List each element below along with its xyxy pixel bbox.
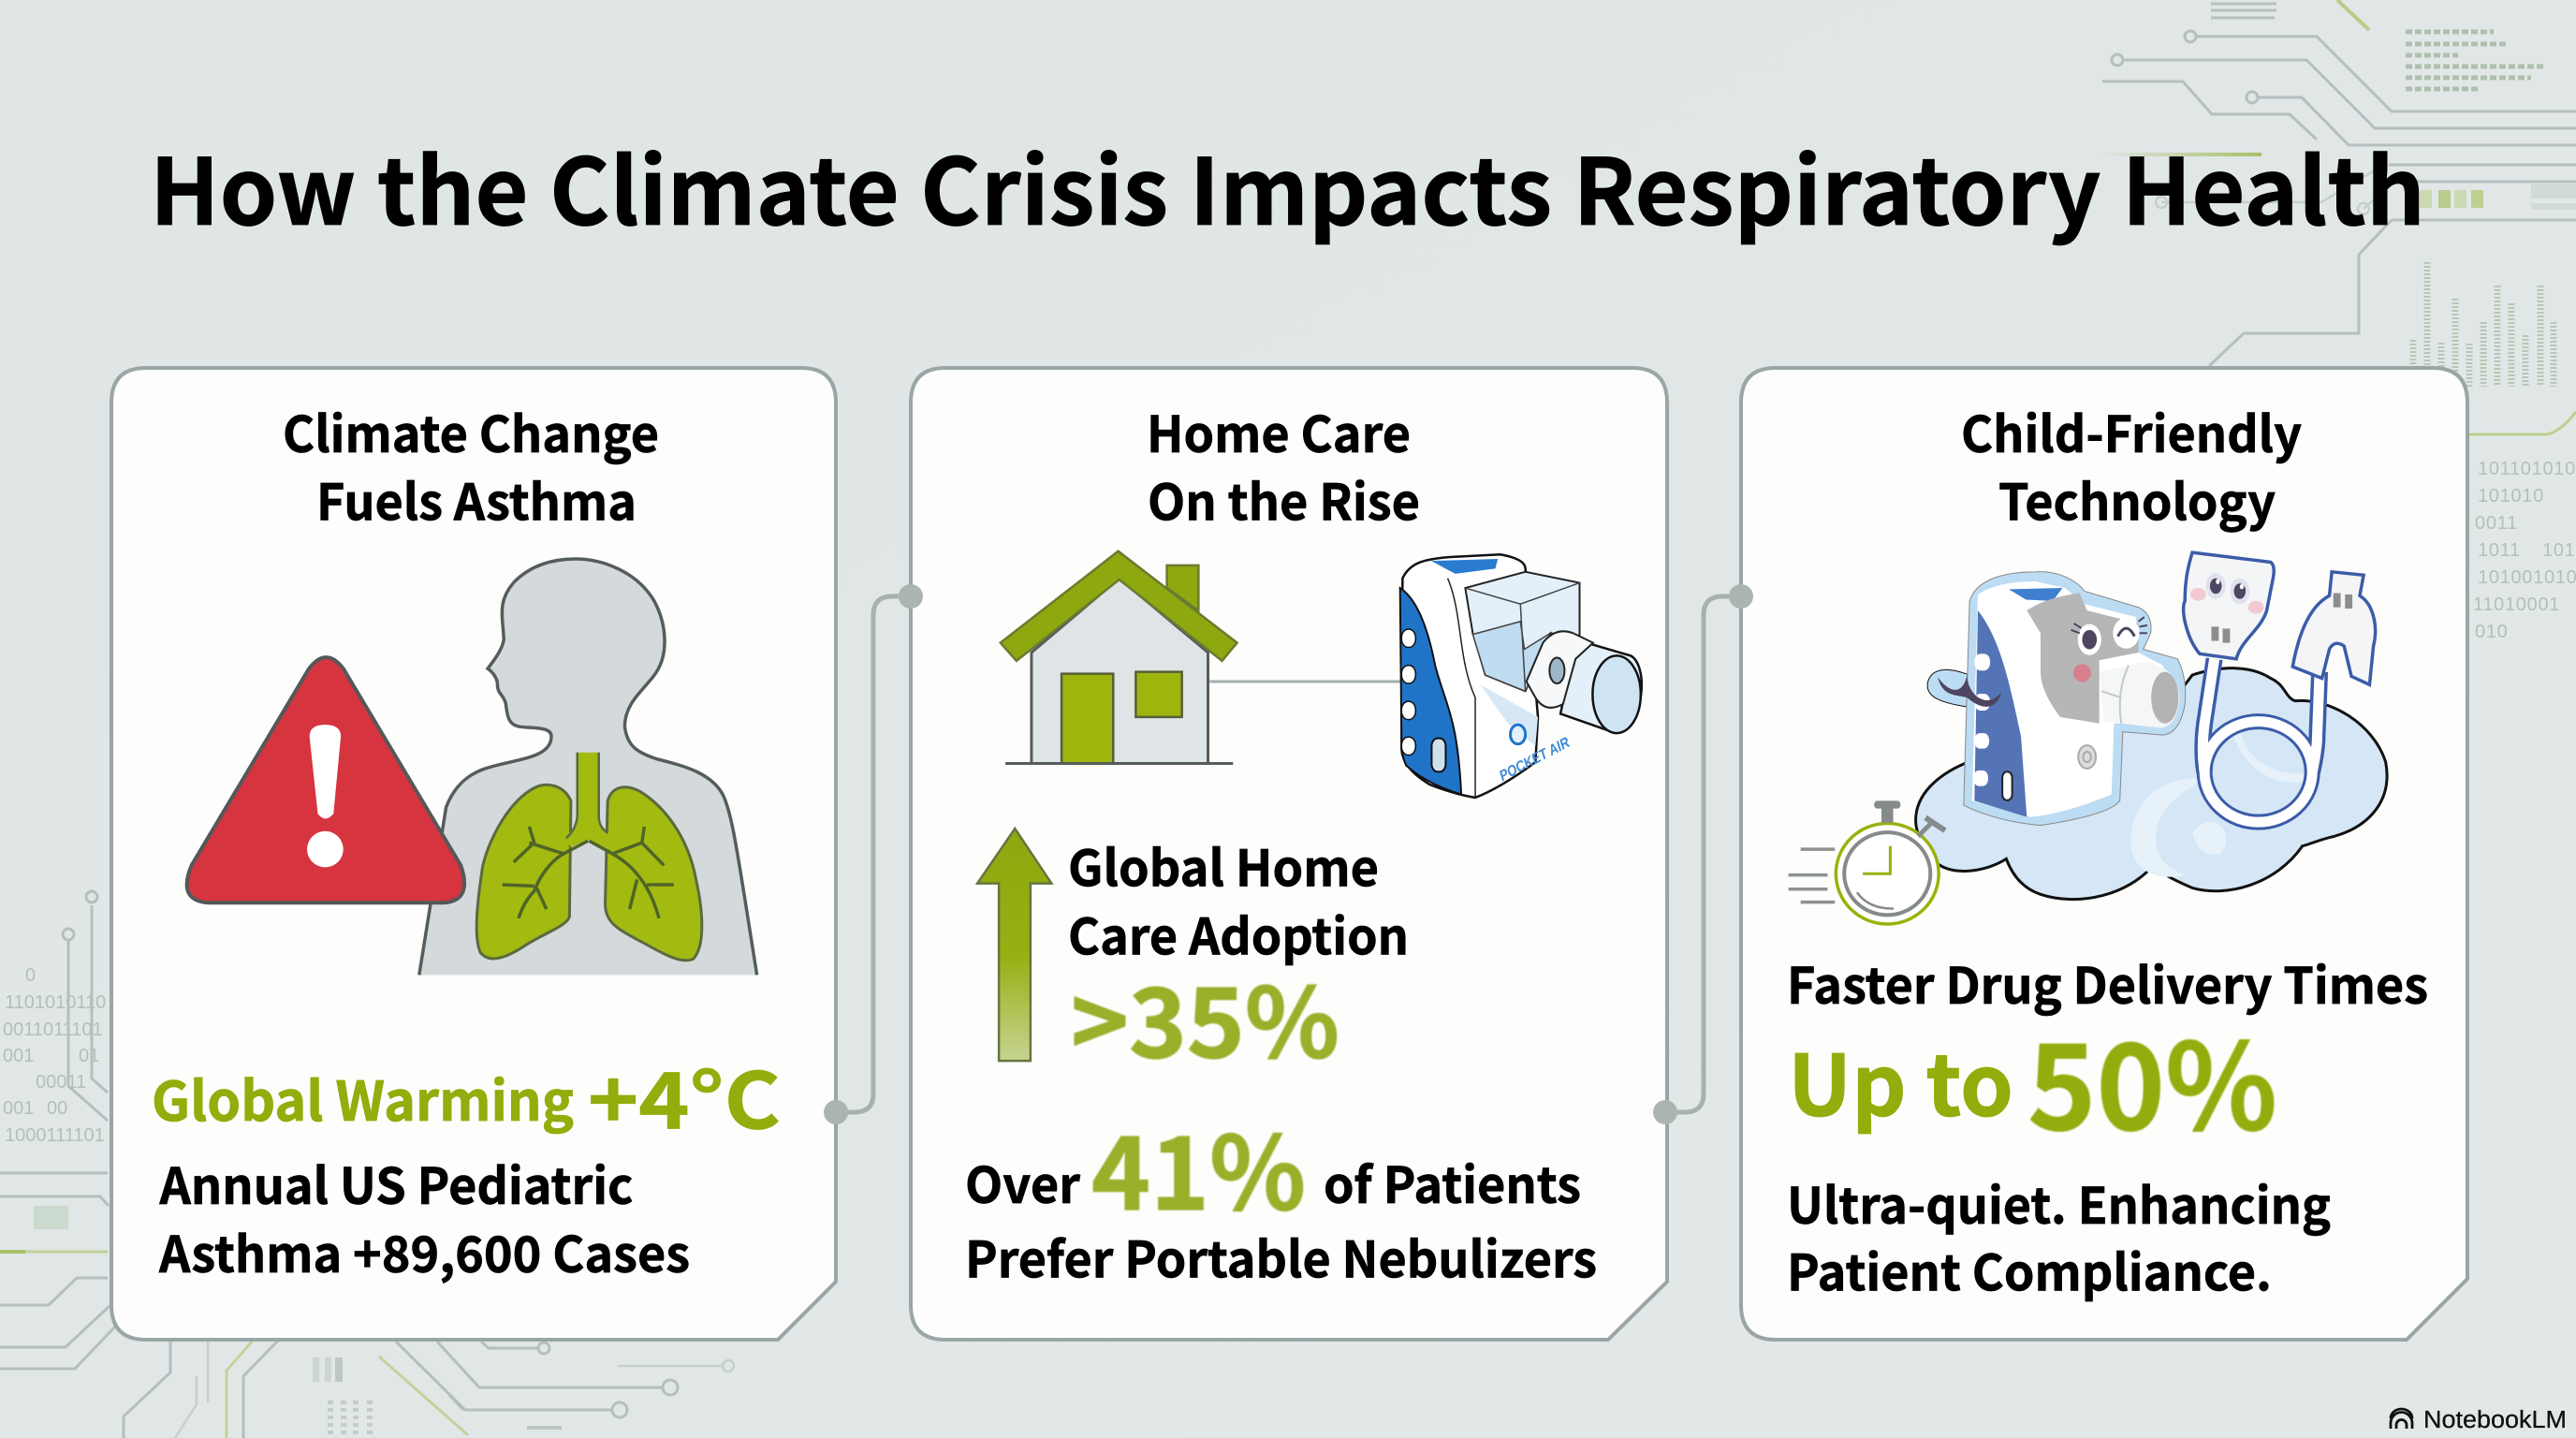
- text: 41 percent prefer portable nebulizers: Prefer Portable Nebulizers: [965, 1221, 1597, 1292]
- circuit pattern: left: [0, 891, 115, 1369]
- binary text: left: [3, 965, 106, 1146]
- panel: child-friendly technology: [1741, 368, 2467, 1340]
- text: pediatric asthma cases: Asthma +89,600 Cases: [158, 1216, 690, 1287]
- binary text: right: 010: [2475, 622, 2508, 642]
- binary text: right: [2473, 459, 2576, 642]
- icon: portable nebulizer: POCKET AIR: [1499, 734, 1572, 785]
- binary text: right: 11010001: [2473, 594, 2560, 615]
- text: 41 percent prefer portable nebulizers: of Patients: [1324, 1147, 1581, 1218]
- heading: Climate Change: [283, 396, 659, 467]
- icon: red warning triangle: [187, 657, 464, 902]
- text: ultra-quiet patient compliance: Patient Compliance.: [1787, 1234, 2272, 1305]
- binary text: left: 001: [3, 1098, 34, 1119]
- stat: global warming: +4°C: [588, 1039, 781, 1152]
- text: 41 percent prefer portable nebulizers: 41%: [1091, 1093, 1306, 1240]
- binary text: left: 1000111101: [5, 1125, 105, 1146]
- binary text: right: 0011: [2475, 513, 2518, 534]
- text: pediatric asthma cases: [158, 1148, 690, 1287]
- text: ultra-quiet patient compliance: Ultra-quiet. Enhancing: [1787, 1167, 2331, 1239]
- binary text: right: 101010: [2478, 486, 2544, 506]
- binary text: left: 0: [25, 965, 36, 986]
- binary text: left: 00: [47, 1098, 67, 1119]
- icon: tubing with character mask and plug: [2184, 552, 2376, 822]
- binary text: right: 101101010: [2478, 459, 2576, 479]
- heading: [283, 396, 659, 536]
- watermark: NotebookLM: NotebookLM: [2423, 1407, 2567, 1433]
- text: 41 percent prefer portable nebulizers: [965, 1093, 1597, 1292]
- connector: card two to card three: [1665, 596, 1741, 1112]
- binary text: left: 0011011101: [3, 1020, 103, 1040]
- binary text: right: 101: [2542, 540, 2575, 561]
- stat: greater than 35 percent: >35%: [1071, 946, 1339, 1086]
- connector nodes on card edges: [824, 584, 1753, 1124]
- binary text: left: 001: [3, 1046, 34, 1066]
- stat: global warming: [152, 1039, 781, 1152]
- heading: Technology: [1998, 464, 2276, 536]
- binary text: right: 1011: [2478, 540, 2521, 561]
- icon: house: [1001, 551, 1400, 763]
- binary text: left: 00011: [36, 1072, 86, 1093]
- text: global home care adoption: [1068, 829, 1409, 970]
- panel: climate change fuels asthma: [111, 368, 836, 1340]
- circuit pattern: bottom: [124, 1341, 734, 1438]
- stat: up to 50 percent: [1788, 992, 2277, 1165]
- title: How the Climate Crisis Impacts Respiratory Health: [150, 119, 2425, 252]
- stat: up to 50 percent: Up to: [1788, 1019, 2013, 1140]
- heading: Child-Friendly: [1961, 396, 2302, 467]
- icon: portable nebulizer: [1400, 554, 1642, 798]
- text: faster drug delivery times: Faster Drug Delivery Times: [1787, 947, 2428, 1019]
- stat: global warming: Global Warming: [152, 1058, 574, 1137]
- heading: [1961, 396, 2302, 536]
- text: 41 percent prefer portable nebulizers: Over: [965, 1147, 1081, 1218]
- heading: On the Rise: [1148, 464, 1420, 536]
- icon: smiling nebulizer character: [1927, 572, 2186, 826]
- icon: stopwatch with speed lines: [1789, 800, 1945, 924]
- heading: [1147, 396, 1420, 536]
- icon: human silhouette with lungs: [419, 559, 757, 975]
- binary text: right: 101001010: [2478, 567, 2576, 588]
- binary text: left: 01: [79, 1046, 99, 1066]
- stat: up to 50 percent: 50%: [2027, 992, 2277, 1165]
- panel: home care on the rise: [911, 368, 1667, 1340]
- connector: card one to card two: [824, 584, 923, 1124]
- text: global home care adoption: Care Adoption: [1068, 899, 1409, 970]
- text: global home care adoption: Global Home: [1068, 829, 1379, 901]
- heading: Fuels Asthma: [316, 464, 637, 536]
- icon: upward arrow: [977, 829, 1051, 1061]
- binary text: left: 1101010110: [5, 992, 106, 1013]
- text: pediatric asthma cases: Annual US Pediatric: [159, 1148, 633, 1219]
- text: ultra-quiet patient compliance: [1787, 1167, 2331, 1305]
- heading: Home Care: [1147, 396, 1411, 467]
- icon: cloud: [1916, 668, 2387, 900]
- circuit pattern: top right: [2102, 0, 2576, 434]
